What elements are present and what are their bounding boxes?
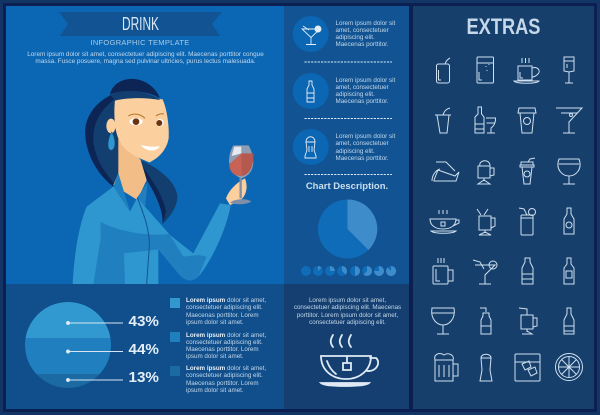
icon: wine glass [558, 159, 580, 184]
option text 3 [336, 133, 396, 162]
option text 2: Maecenas porttitor. [336, 98, 389, 105]
icon: coffee cup [514, 58, 539, 83]
legend items: ipsum dolor sit amet. [186, 319, 244, 326]
option text 3: adipiscing elit. [336, 148, 375, 155]
pie chart: 43 44 13 [25, 302, 123, 388]
panel: extras [413, 6, 594, 409]
option icons and dashed dividers [292, 16, 392, 175]
extras icon grid [430, 56, 583, 382]
percentages: 44% [128, 341, 159, 358]
icon: mug on stem [519, 308, 537, 334]
icon: juice with straw [519, 208, 536, 235]
title: DRINK [122, 14, 159, 34]
legend items: ipsum dolor sit amet. [186, 387, 244, 394]
option text 1: Maecenas porttitor. [336, 41, 389, 48]
panel: stats [6, 284, 284, 409]
icon: cocktail with lemon [473, 260, 497, 284]
icon: kettle [432, 162, 459, 181]
legend items: Lorem ipsum dolor sit amet, [186, 297, 266, 304]
description text: porttitor. Lorem ipsum dolor sit amet, [297, 312, 398, 319]
legend items: Lorem ipsum dolor sit amet, [186, 365, 266, 372]
description text: consectetuer adipiscing elit. Maecenas [294, 304, 401, 311]
chart heading: Chart Description. [306, 181, 388, 192]
icon: glass bottle [522, 258, 533, 284]
panel: description [284, 284, 409, 409]
icon: beer bottle [564, 208, 574, 234]
option text 2: adipiscing elit. [336, 91, 375, 98]
icon: bottle and glass [475, 107, 496, 133]
option text 2: Lorem ipsum dolor sit [336, 76, 395, 84]
icon: whiskey with ice [515, 354, 540, 381]
percentages [128, 313, 159, 386]
description text [294, 297, 401, 326]
legend items: Lorem ipsum dolor sit amet, [186, 332, 266, 338]
icon: mulled glass [477, 209, 495, 235]
frame: left block [3, 3, 412, 412]
icon: labelled bottle [564, 258, 574, 284]
legend items: ipsum dolor sit amet. [186, 353, 244, 360]
icon: cup with straw [435, 108, 451, 133]
icon: glass [477, 57, 494, 83]
pie chart: main [318, 200, 378, 258]
intro text: massa. Fusce posuere, magna sed pulvinar ultricies, purus lectus malesuada. [35, 58, 256, 65]
legend items [170, 297, 266, 394]
option text 3: Maecenas porttitor. [336, 155, 389, 162]
icon: wine flute [564, 57, 574, 83]
title ribbon [59, 12, 222, 36]
icon: citrus slice [556, 354, 582, 380]
icon: tea cup small [430, 210, 459, 233]
icon: can [436, 58, 450, 83]
percentages: 13% [128, 369, 159, 386]
legend items: Maecenas porttitor. Lorem [186, 380, 259, 387]
legend items: consectetuer adipiscing elit. [186, 304, 263, 311]
legend items: consectetuer adipiscing elit. [186, 372, 263, 379]
option text 3: Lorem ipsum dolor sit [336, 133, 395, 140]
intro text: Lorem ipsum dolor sit amet, consectetuer adipiscing elit. Maecenas porttitor congue [27, 51, 264, 58]
icon: mug [433, 258, 453, 284]
legend items: consectetuer adipiscing elit. [186, 339, 263, 346]
intro text [27, 51, 264, 65]
icon: lid cup with straw [520, 158, 535, 184]
icon: tea cup [318, 334, 379, 387]
subtitle: INFOGRAPHIC TEMPLATE [90, 38, 190, 47]
icon: irish coffee [478, 161, 494, 184]
extras heading: EXTRAS [467, 14, 540, 39]
option text 1 [336, 20, 396, 48]
percentages: 43% [128, 313, 159, 330]
description text: consectetuer adipiscing elit. [309, 319, 386, 326]
panel: options and chart [284, 6, 409, 284]
description text: Lorem ipsum dolor sit amet, [309, 297, 386, 304]
icon: beer mug [435, 354, 458, 381]
option text 1: adipiscing elit. [336, 34, 375, 41]
option text 1: Lorem ipsum dolor sit [336, 20, 395, 26]
legend items: Maecenas porttitor. Lorem [186, 346, 259, 353]
legend items: Maecenas porttitor. Lorem [186, 312, 259, 319]
icon: wide wine glass [432, 308, 454, 334]
small pie charts row [301, 266, 396, 276]
icon: martini [556, 108, 582, 133]
icon: beer glass [480, 354, 492, 381]
illustration: woman with wine glass [72, 78, 254, 284]
icon: takeaway cup [518, 108, 536, 133]
option text 1: amet, consectetuer [336, 27, 389, 34]
option text 2 [336, 76, 396, 105]
icon: champagne bottle [564, 308, 574, 334]
option text 2: amet, consectetuer [336, 84, 389, 91]
option text 3: amet, consectetuer [336, 140, 389, 147]
frame: right block [410, 3, 597, 412]
panel: hero [6, 6, 284, 284]
icon: soda bottle with straw [480, 308, 491, 334]
